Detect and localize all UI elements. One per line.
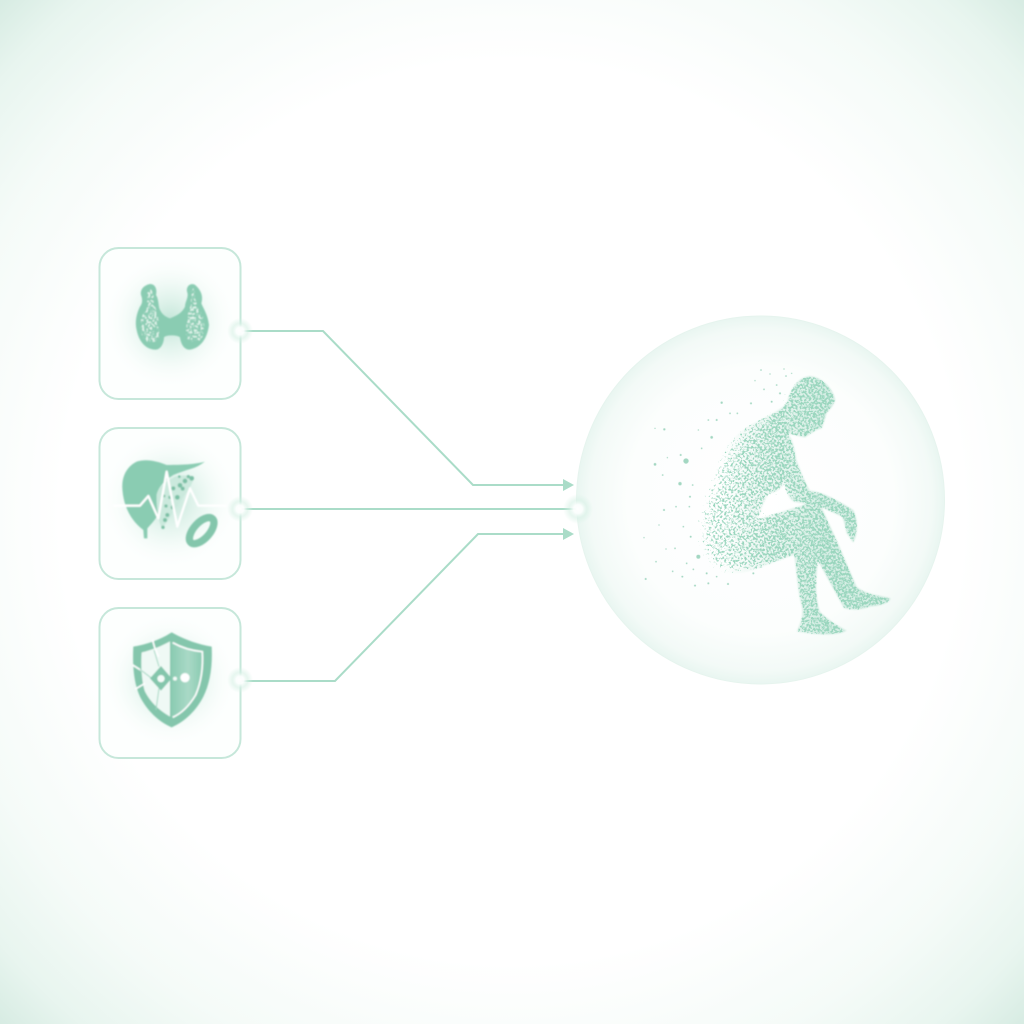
card: thyroid [100,248,240,399]
scattered particles [643,368,792,587]
connector: thyroid to sphere [241,331,574,491]
figure speckle [697,376,891,635]
cracks [133,639,159,689]
glow node: sphere input [563,494,593,524]
figure underlay [697,376,891,635]
icon: liver with pulse [113,460,227,548]
card: liver and pancreas [100,428,240,579]
glow node: shield card [227,667,253,693]
connector: liver to sphere [241,508,578,510]
dots: pancreas cells [161,475,194,529]
sphere [576,316,944,684]
connector: shield to sphere [241,528,574,681]
icon: shield [133,632,212,727]
icon: thyroid gland [136,284,209,350]
card: cracked shield [100,608,240,758]
figure: dissolving seated person [643,368,891,635]
glow node: liver card [227,496,253,522]
glow node: thyroid card [227,318,253,344]
